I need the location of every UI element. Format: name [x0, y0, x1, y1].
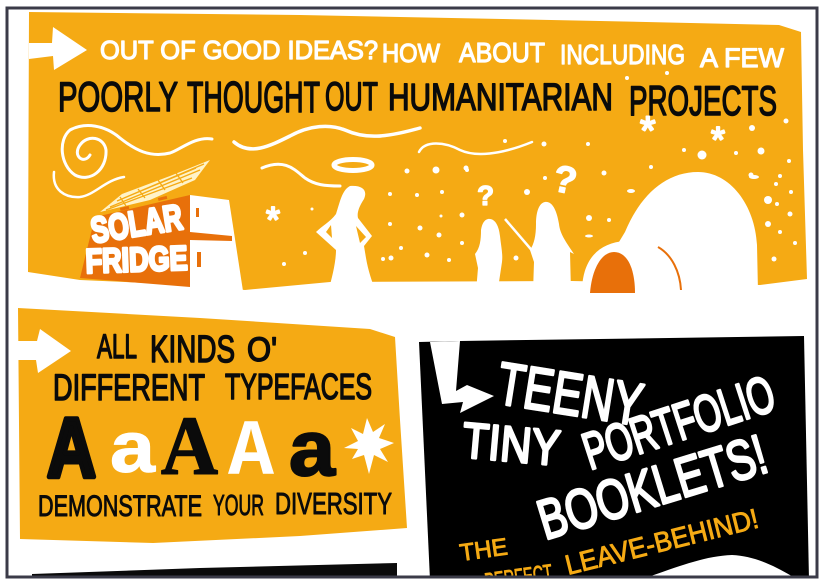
heading: poorly thought out humanitarian projects: HUMANITARIAN	[388, 77, 613, 119]
question mark small: ?	[477, 180, 494, 211]
icon: snowflakes	[640, 116, 726, 141]
arrow: L-shaped pointer	[430, 341, 494, 413]
heading: out of good ideas: ABOUT	[459, 37, 545, 68]
figure details: hands on hips	[326, 225, 366, 243]
igloo	[582, 172, 758, 293]
letter samples: a	[110, 408, 156, 488]
heading: out of good ideas: HOW	[382, 38, 440, 68]
label: solar fridge: SOLAR	[88, 196, 185, 251]
figure: woman with halo	[316, 186, 372, 282]
heading: all kinds of different typefaces: ALL	[97, 328, 137, 366]
panel: humanitarian projects banner	[28, 12, 807, 293]
figure: small person	[475, 218, 502, 282]
heading: out of good ideas	[100, 40, 784, 68]
caption: demonstrate your diversity: DIVERSITY	[275, 486, 392, 521]
solar fridge illustration	[80, 160, 243, 291]
panel: teeny tiny portfolio booklets	[419, 336, 809, 587]
tagline: the perfect leave-behind: THE	[458, 534, 509, 567]
arrow: typefaces pointer	[18, 329, 71, 373]
heading: all kinds of different typefaces	[54, 334, 372, 401]
letter samples	[46, 416, 337, 480]
heading: out of good ideas: INCLUDING	[560, 39, 685, 70]
solar panel	[100, 160, 210, 212]
letter samples: A	[161, 400, 218, 493]
caption: demonstrate your diversity: DEMONSTRATE	[38, 490, 202, 523]
snow dots	[282, 71, 797, 266]
heading: poorly thought out humanitarian projects: OUT	[325, 75, 378, 119]
caption: demonstrate your diversity: YOUR	[213, 490, 264, 522]
letter samples: A	[228, 408, 275, 499]
panel: typefaces	[18, 308, 407, 543]
icon: sparkle star	[344, 418, 394, 474]
heading: poorly thought out humanitarian projects: THOUGHT	[187, 73, 320, 122]
heading: out of good ideas: A FEW	[700, 43, 785, 73]
heading: teeny tiny portfolio booklets: TEENY	[493, 350, 648, 439]
icon: halo	[334, 160, 372, 170]
wind swirls	[54, 126, 532, 197]
igloo door	[590, 252, 635, 293]
heading: all kinds of different typefaces: TYPEFACES	[225, 366, 372, 407]
heading: all kinds of different typefaces: KINDS	[150, 329, 235, 371]
letter samples: a	[289, 404, 336, 492]
letter samples: A	[47, 401, 96, 495]
icon: snowflakes: *	[640, 109, 656, 153]
stick	[504, 218, 532, 251]
figure: tall person with stick	[530, 202, 574, 282]
label: solar fridge: FRIDGE	[85, 239, 188, 281]
heading: poorly thought out humanitarian projects	[60, 80, 776, 116]
heading: teeny tiny portfolio booklets: TINY	[460, 412, 563, 476]
tagline: the perfect leave-behind	[458, 508, 758, 576]
heading: all kinds of different typefaces: DIFFERENT	[53, 367, 205, 408]
panel: bottom black strip	[32, 563, 397, 576]
tagline: the perfect leave-behind: LEAVE-BEHIND!	[562, 503, 762, 581]
heading: out of good ideas: OUT OF GOOD IDEAS?	[100, 35, 378, 65]
arrow: banner pointer	[29, 27, 87, 70]
heading: poorly thought out humanitarian projects: POORLY	[58, 73, 178, 120]
label: solar fridge	[86, 204, 188, 274]
icon: snowflakes: *	[711, 119, 725, 160]
icon: asterisk star: *	[266, 199, 280, 240]
question mark large: ?	[549, 158, 581, 204]
white booklet shape	[652, 555, 791, 576]
caption: demonstrate your diversity	[39, 492, 392, 517]
heading: teeny tiny portfolio booklets	[464, 361, 774, 540]
heading: all kinds of different typefaces: O'	[247, 331, 277, 369]
